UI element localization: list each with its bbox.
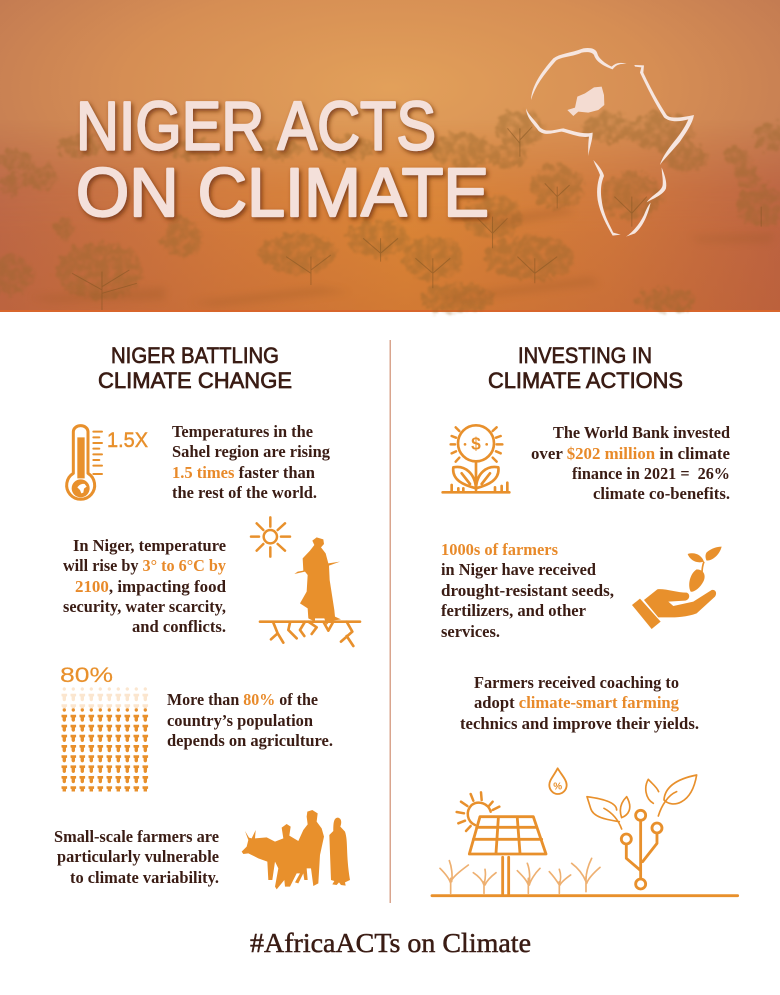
heading: investing in climate actions: INVESTING IN [518,343,652,368]
text: 1000s of farmers: 1000s of farmers [441,540,559,559]
text: 1000s of farmers: in Niger have received [441,560,596,579]
text: small-scale farmers: to climate variability. [70,868,219,887]
text: climate-smart farming [460,673,699,733]
digital plant [621,810,662,889]
title: NIGER ACTS [76,88,436,164]
column divider [390,340,391,903]
stat: 80%: 80% [60,664,113,687]
icon: cow and farmers silhouette [242,810,350,889]
text: small-scale farmers: Small-scale farmers are [54,827,219,846]
text: temperatures in the Sahel: the rest of the world. [172,483,317,502]
heading: investing in climate actions: CLIMATE ACTIONS [488,368,683,393]
icon: thermometer with 1.5X [67,426,148,499]
icon: money plant [443,425,509,492]
water drop with percent: % [553,781,562,792]
text: population depends on agriculture: country’s population [167,711,313,730]
dune shadows [30,207,775,306]
text: population depends on agriculture: More than 80% of the [167,690,318,709]
water drop with percent [549,768,567,794]
icon: hand holding seedling [632,547,722,629]
text: temperature rise in Niger: will rise by 3° to 6°C by [63,556,227,575]
icon: Africa map with Niger highlighted [526,48,694,237]
text: temperature rise in Niger: In Niger, temperature [73,536,226,555]
text: 1000s of farmers: fertilizers, and other [441,601,586,620]
wheat plants [440,858,600,893]
text: temperatures in the Sahel: Sahel region are rising [172,442,331,461]
text: temperatures in the Sahel [172,422,331,502]
Niger shape [567,87,604,116]
text: temperature rise in Niger: and conflicts. [132,617,226,636]
text: 1000s of farmers [441,540,614,641]
ground line [432,891,738,900]
text: World Bank investment [531,423,730,503]
text: World Bank investment: The World Bank invested [553,423,730,442]
trees [0,110,780,313]
text: temperatures in the Sahel: Temperatures in the [172,422,313,441]
light figures: 20 percent [62,687,148,710]
text: small-scale farmers [54,827,219,887]
text: temperature rise in Niger: security, water scarcity, [63,597,226,616]
text: 1000s of farmers: drought-resistant seeds, [441,581,614,600]
text: World Bank investment: over $202 million in climate [531,444,730,463]
text: small-scale farmers: particularly vulnerable [57,847,219,866]
pictogram: 80 of 100 people [62,687,148,792]
text: temperature rise in Niger: 2100, impacting food [75,577,226,596]
stat: 1.5X: 1.5X [107,428,148,452]
text: World Bank investment: finance in 2021 = 26% [572,464,730,483]
heading: investing in climate actions [488,343,683,393]
text: population depends on agriculture [167,690,333,750]
text: 1000s of farmers: services. [441,622,500,641]
footer hashtag: #AfricaACTs on Climate [250,928,531,958]
icon: smart farm with solar panel and digital plant [432,768,738,896]
text: climate-smart farming: adopt climate-smart farming [474,693,680,712]
sun [457,792,499,831]
title: ON CLIMATE [76,154,489,231]
heading: Niger battling climate change [98,343,292,393]
hero banner: desert landscape [0,0,780,313]
dark figures: 80 percent [62,708,148,792]
leaves [587,775,697,829]
text: World Bank investment: climate co-benefits. [593,484,730,503]
text: climate-smart farming: technics and improve their yields. [460,714,699,733]
solar panel [469,817,546,894]
heading: Niger battling climate change: CLIMATE CHANGE [98,368,292,393]
text: population depends on agriculture: depends on agriculture. [167,731,333,750]
icon: money plant: $ [471,433,481,453]
text: temperatures in the Sahel: 1.5 times faster than [172,463,315,482]
text: climate-smart farming: Farmers received coaching to [474,673,679,692]
icon: sun and herder on cracked earth [251,517,360,646]
text: temperature rise in Niger [63,536,227,636]
title [76,88,489,231]
branches [72,127,761,310]
heading: Niger battling climate change: NIGER BATTLING [111,343,279,368]
